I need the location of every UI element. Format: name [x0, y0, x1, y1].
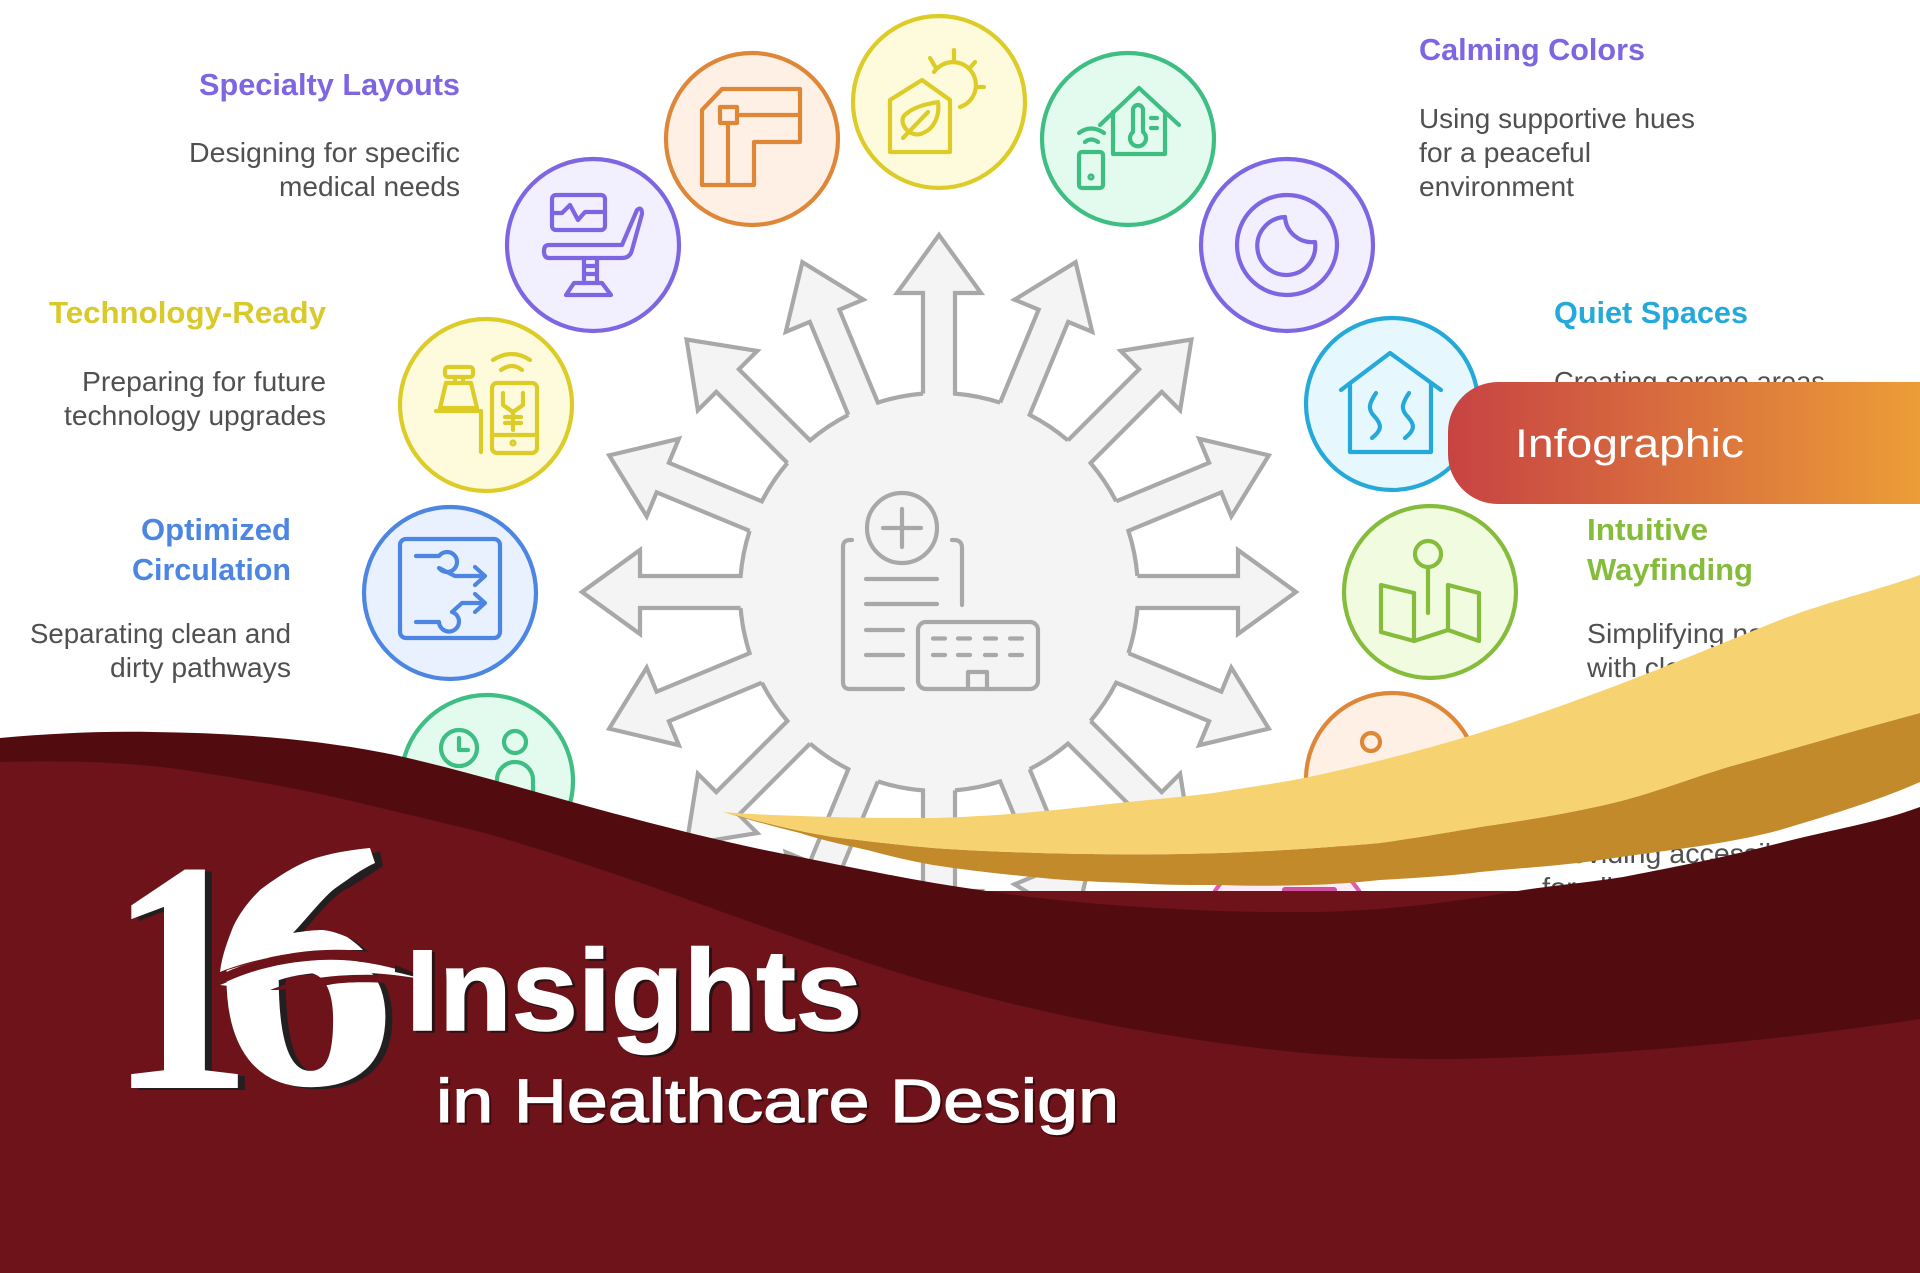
title number: 16 — [108, 790, 427, 1162]
text block: intuitive wayfinding: Intuitive — [1587, 512, 1708, 547]
icon: clock and person — [441, 730, 533, 792]
panel: pink circle — [1201, 852, 1373, 1024]
flag shadow — [260, 851, 383, 953]
text block: technology-ready: Technology-Ready — [49, 295, 327, 330]
panel: yellow circle with connected devices — [400, 319, 572, 491]
text block: optimized circulation: dirty pathways — [110, 652, 291, 683]
panel: orange lower circle with person — [1306, 693, 1478, 865]
light maroon wave — [0, 761, 1920, 1273]
icon: medical chair and monitor — [544, 195, 642, 295]
icon: floor plan — [702, 89, 800, 185]
title: Insights: Insights — [406, 927, 862, 1055]
panel: purple circle with calming moon — [1201, 159, 1373, 331]
panel: purple circle with exam chair — [507, 159, 679, 331]
icon: house with waves — [1341, 353, 1441, 452]
title number: 16: 6 — [221, 792, 403, 1158]
icon: map with pin — [1381, 541, 1479, 641]
text block: optimized circulation: Circulation — [132, 552, 291, 587]
text block: technology-ready: technology upgrades — [64, 400, 326, 431]
icon: separated pathways — [400, 539, 500, 638]
text block: calming colors: for a peaceful — [1419, 137, 1591, 168]
text block: specialty layouts: medical needs — [279, 171, 460, 202]
panel: top yellow circle with eco house — [853, 16, 1025, 188]
text block: quiet spaces: Quiet Spaces — [1554, 295, 1748, 330]
title number: 16: 1 — [108, 794, 253, 1160]
icon: smart home thermostat — [1079, 88, 1179, 188]
text block: calming colors: Calming Colors — [1419, 32, 1645, 67]
panel: green lower circle with clock and person — [401, 695, 573, 867]
radial arrow hub — [582, 235, 1296, 949]
text block: accessibility — [1542, 838, 1822, 903]
text block: quiet spaces — [1554, 295, 1825, 397]
text block: specialty layouts — [189, 67, 460, 202]
dark maroon wave — [0, 732, 1920, 1273]
gold ribbon — [723, 575, 1920, 886]
text block: optimized circulation: Optimized — [141, 512, 291, 547]
flag of the six — [220, 848, 375, 972]
text block: intuitive wayfinding: Wayfinding — [1587, 552, 1753, 587]
banner: infographic label: Infographic — [1515, 422, 1744, 466]
text block: technology-ready — [49, 295, 327, 431]
panel: blue circle with circulation routes — [364, 507, 536, 679]
text block: calming colors — [1419, 32, 1695, 202]
banner: infographic label — [1448, 382, 1920, 504]
text block: accessibility: for all users — [1542, 872, 1692, 903]
text block: intuitive wayfinding: with clear signage — [1586, 652, 1812, 683]
maroon base band — [0, 891, 1920, 1273]
icon: terminal and phone — [436, 354, 537, 453]
text block: intuitive wayfinding — [1586, 512, 1862, 683]
title: Insights: Insights — [409, 929, 865, 1057]
panel: orange circle with floor plan — [666, 53, 838, 225]
text block: calming colors: Using supportive hues — [1419, 103, 1695, 134]
text block: optimized circulation: Separating clean and — [30, 618, 291, 649]
title number: 16: 6 — [214, 790, 396, 1156]
swoosh across the six — [220, 950, 427, 990]
icon: eco house and sun — [890, 50, 984, 152]
text block: optimized circulation — [30, 512, 291, 683]
text block: intuitive wayfinding: Simplifying navigation — [1587, 618, 1862, 649]
panel: green circle with smart home — [1042, 53, 1214, 225]
text block: accessibility: Providing accessibility — [1542, 838, 1822, 869]
text block: quiet spaces: Creating serene areas — [1554, 366, 1825, 397]
text block: calming colors: environment — [1419, 171, 1574, 202]
text block: technology-ready: Preparing for future — [82, 366, 326, 397]
icon: moon in ring — [1237, 195, 1337, 295]
text block: specialty layouts: Designing for specific — [189, 137, 460, 168]
text block: specialty layouts: Specialty Layouts — [199, 67, 460, 102]
title number: 16: 1 — [115, 796, 260, 1162]
subtitle: in Healthcare Design: in Healthcare Design — [436, 1067, 1119, 1135]
icon: person — [1358, 733, 1384, 775]
subtitle: in Healthcare Design: in Healthcare Design — [438, 1069, 1121, 1137]
icon: hospital document — [843, 493, 1038, 689]
panel: lime circle with map — [1344, 506, 1516, 678]
panel: cyan circle with quiet house — [1306, 318, 1478, 490]
maroon mask behind the six's flag — [221, 838, 404, 972]
